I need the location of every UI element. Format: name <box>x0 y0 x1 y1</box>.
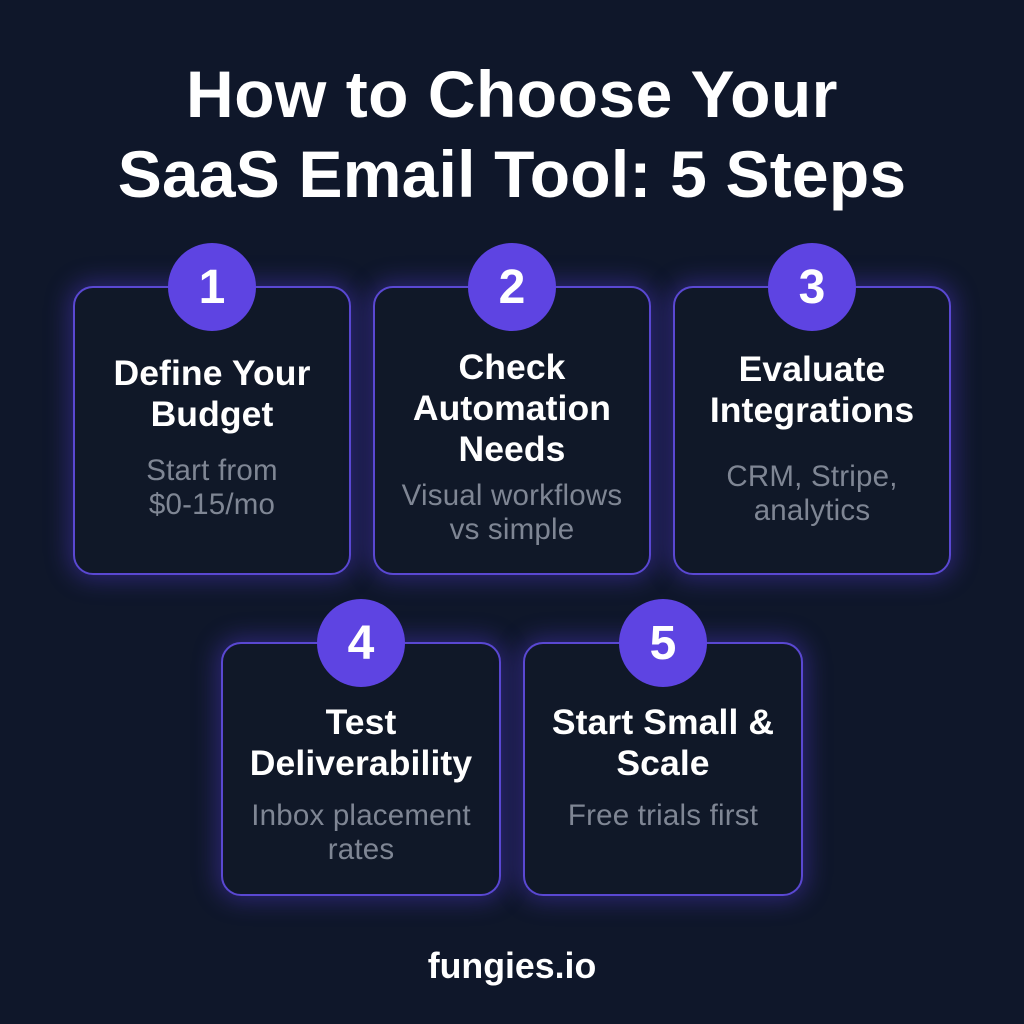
panel: step 1 <box>73 286 351 575</box>
icon: badge 2: 2 <box>499 261 525 314</box>
text: step 3 description: CRM, Stripe, <box>726 460 898 493</box>
heading: step 2: Check <box>458 347 566 387</box>
text: step 4 description: Inbox placement <box>251 799 471 832</box>
icon: badge 5: 5 <box>650 617 676 670</box>
title <box>118 57 906 211</box>
footer brand: fungies.io <box>428 946 596 986</box>
text: step 1 description: Start from <box>146 454 278 487</box>
heading: step 4: Deliverability <box>250 743 472 783</box>
heading: step 1: Define Your <box>113 353 311 393</box>
icon: badge 4: 4 <box>348 617 374 670</box>
heading: step 4: Test <box>326 702 396 742</box>
heading: step 4 <box>250 702 472 783</box>
icon: badge 2 <box>468 243 556 331</box>
text: step 2 description: Visual workflows <box>402 479 622 512</box>
text: step 2 description <box>402 479 622 546</box>
heading: step 1 <box>113 353 311 434</box>
text: step 1 description <box>146 454 278 521</box>
heading: step 3 <box>710 349 914 430</box>
text: step 4 description: rates <box>328 832 394 866</box>
title: SaaS Email Tool: 5 Steps <box>118 137 906 211</box>
heading: step 2: Needs <box>458 429 566 469</box>
text: step 3 description: analytics <box>754 494 870 527</box>
heading: step 5: Scale <box>616 743 710 783</box>
text: step 5 description: Free trials first <box>568 799 758 832</box>
title: How to Choose Your <box>186 57 838 131</box>
text: step 1 description: $0-15/mo <box>149 488 275 521</box>
icon: badge 4 <box>317 599 405 687</box>
heading: step 3: Evaluate <box>739 349 885 389</box>
icon: badge 3: 3 <box>799 261 825 314</box>
heading: step 5: Start Small & <box>552 702 774 742</box>
text: step 3 description <box>726 460 898 527</box>
panel: step 2 <box>373 286 651 575</box>
icon: badge 5 <box>619 599 707 687</box>
panel: step 5 <box>523 642 803 896</box>
heading: step 2: Automation <box>413 388 611 428</box>
icon: badge 3 <box>768 243 856 331</box>
heading: step 2 <box>413 347 611 469</box>
panel: step 4 <box>221 642 501 896</box>
heading: step 3: Integrations <box>710 390 914 430</box>
text: step 4 description <box>251 799 471 866</box>
panel: step 3 <box>673 286 951 575</box>
text: step 2 description: vs simple <box>450 513 574 546</box>
icon: badge 1 <box>168 243 256 331</box>
heading: step 5 <box>552 702 774 783</box>
icon: badge 1: 1 <box>199 261 225 314</box>
heading: step 1: Budget <box>151 394 273 434</box>
